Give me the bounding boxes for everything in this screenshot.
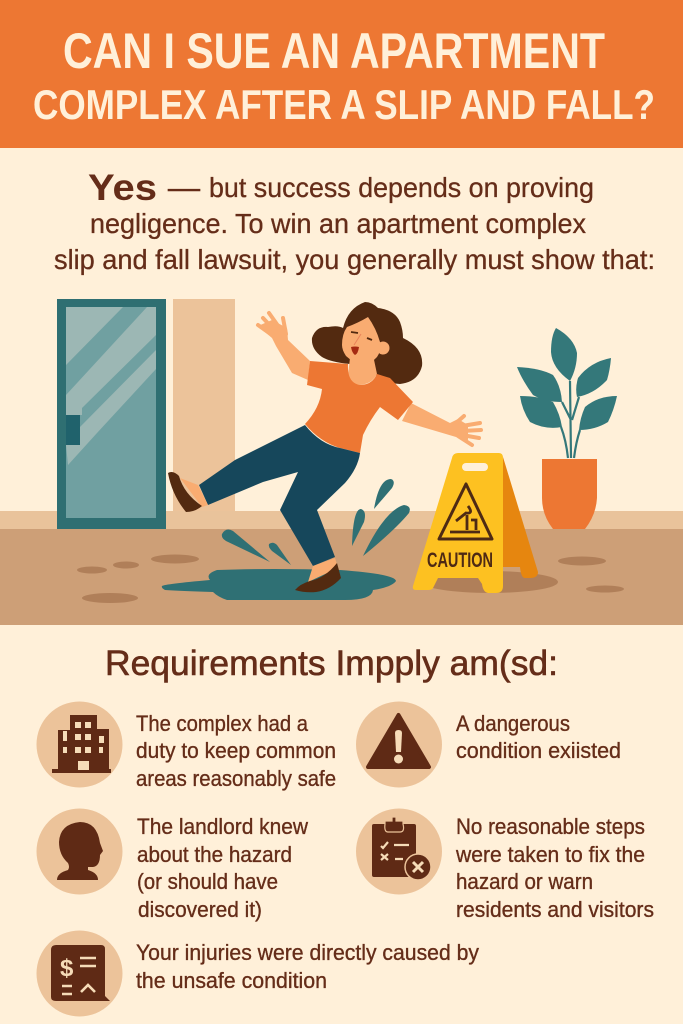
intro text: slip and fall lawsuit, you generally must show that: <box>54 244 655 275</box>
requirement: dangerous condition: condition exiisted <box>456 738 621 763</box>
potted plant <box>517 328 617 529</box>
floor <box>0 529 683 625</box>
face <box>342 317 390 364</box>
requirement: causation: Your injuries were directly caused by <box>136 940 480 965</box>
requirement: duty of care <box>36 702 336 791</box>
requirement: no reasonable steps: hazard or warn <box>456 869 593 894</box>
requirement: landlord knowledge <box>36 808 309 922</box>
glass door <box>57 299 166 529</box>
neck <box>348 355 377 385</box>
jeans <box>199 425 360 566</box>
requirement: no reasonable steps <box>356 808 654 922</box>
intro text: Yes <box>88 167 157 208</box>
requirement: no reasonable steps: were taken to fix the <box>455 842 645 867</box>
requirement: causation <box>36 930 480 1016</box>
requirement: landlord knowledge: about the hazard <box>137 842 292 867</box>
requirement: landlord knowledge: discovered it) <box>138 897 262 922</box>
icon: invoice document: $ <box>60 955 74 982</box>
requirement: duty of care: areas reasonably safe <box>136 766 336 791</box>
requirement: duty of care: The complex had a <box>136 711 308 736</box>
hair back <box>312 302 422 384</box>
icon: invoice document <box>36 930 122 1016</box>
intro text: — <box>168 172 200 203</box>
title banner <box>0 0 683 148</box>
orange shirt <box>305 361 413 453</box>
requirement: duty of care: duty to keep common <box>136 738 336 763</box>
puddle and splashes <box>162 479 410 600</box>
section heading: Requirements Impply am(sd: <box>105 644 558 683</box>
falling woman <box>168 302 481 592</box>
intro text: but success depends on proving <box>209 172 594 203</box>
caution sign: CAUTION <box>427 549 493 572</box>
baseboard <box>0 511 683 529</box>
icon: clipboard with X <box>356 808 442 894</box>
requirement: no reasonable steps: No reasonable steps <box>456 814 645 839</box>
icon: apartment building <box>36 702 122 788</box>
requirement: landlord knowledge: The landlord knew <box>137 814 309 839</box>
icon: head silhouette <box>36 808 122 894</box>
requirement: dangerous condition: A dangerous <box>456 711 570 736</box>
requirement: causation: the unsafe condition <box>136 968 327 993</box>
icon: warning triangle <box>356 702 442 788</box>
requirement: dangerous condition <box>356 702 621 788</box>
requirement: landlord knowledge: (or should have <box>137 869 278 894</box>
shoes <box>168 472 341 592</box>
illustration: slip and fall scene <box>0 299 683 625</box>
feet <box>180 478 338 582</box>
caution sign <box>413 453 558 593</box>
intro text <box>54 167 655 275</box>
requirement: no reasonable steps: residents and visitors <box>456 897 654 922</box>
intro text: negligence. To win an apartment complex <box>90 208 586 239</box>
outstretched arm and hand <box>402 403 481 445</box>
raised arm and hand <box>258 313 310 380</box>
wall pillar <box>173 299 235 511</box>
